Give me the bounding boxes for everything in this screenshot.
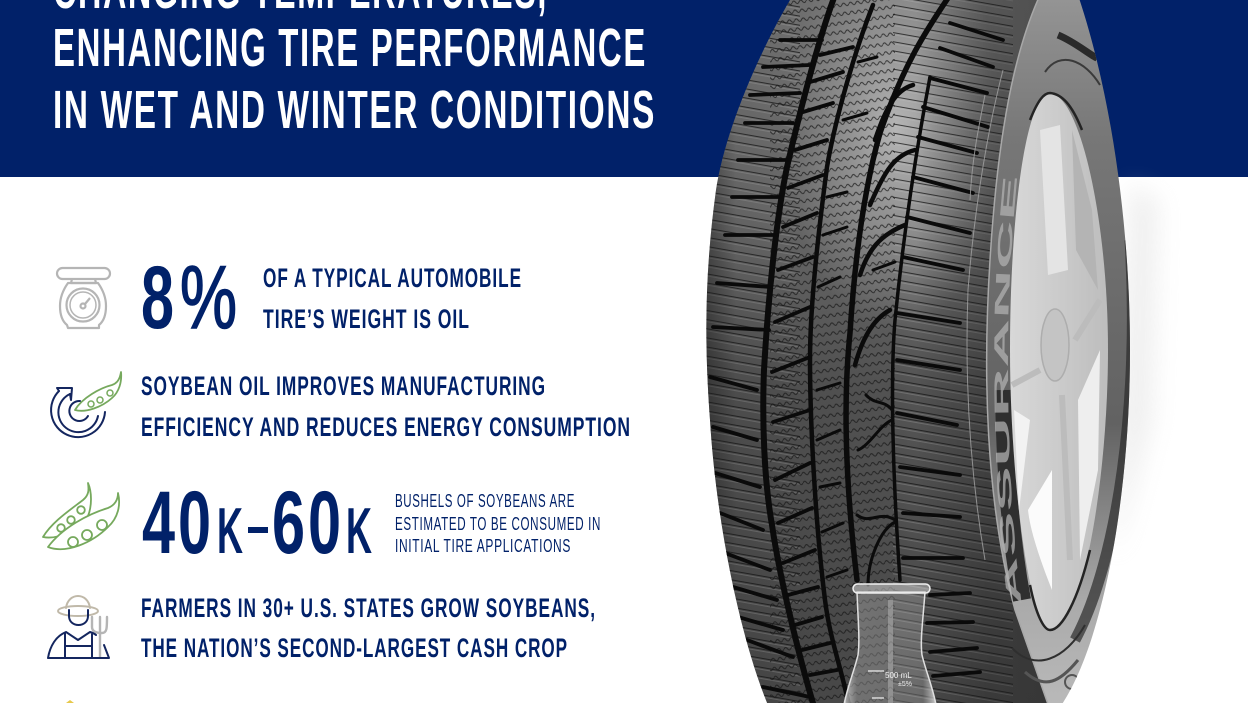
text: farmers: THE NATION’S SECOND-LARGEST CASH CROP [141,633,568,663]
title: IN WET AND WINTER CONDITIONS [53,80,656,140]
flask [843,584,937,703]
text: efficiency [141,371,631,442]
rim light gaps [1040,125,1068,275]
text: farmers [141,593,596,663]
lower sidewall details [1012,625,1085,661]
icon: soybean pods [43,483,119,549]
icon: scale [57,268,110,328]
rim outline [1030,93,1090,630]
title: ENHANCING TIRE PERFORMANCE [53,18,647,78]
stat: 40k-60k: K [346,494,372,567]
tire shadow [1115,185,1158,560]
text: weight [263,263,522,334]
stat: 8%: % [180,247,237,347]
text: bushels [395,491,601,556]
text: weight: TIRE’S WEIGHT IS OIL [263,304,470,334]
shoulder lines [967,70,1003,560]
stat: 8% [141,247,237,347]
text: efficiency: SOYBEAN OIL IMPROVES MANUFACTURING [141,371,546,401]
tire photo illustration: ASSURANCE [994,178,1022,601]
text: bushels: ESTIMATED TO BE CONSUMED IN [395,514,601,534]
row: farmers [48,593,596,663]
stat: 8%: 8 [141,247,174,347]
row: bushels stat [43,472,601,572]
outer sidewall band [1075,240,1132,640]
text: efficiency: EFFICIENCY AND REDUCES ENERGY CONSUMPTION [141,412,631,442]
text: farmers: FARMERS IN 30+ U.S. STATES GROW SOYBEANS, [141,593,596,623]
icon: cropped yellow tip [66,700,74,703]
stat: 40k-60k: 60 [272,472,344,572]
flask: 500 mL [885,671,912,680]
text: bushels: INITIAL TIRE APPLICATIONS [395,536,571,556]
stat: 40k-60k [142,472,372,572]
wheel rim [1010,93,1108,630]
flask: ±5% [898,681,912,688]
sidewall [987,0,1130,703]
text: weight: OF A TYPICAL AUTOMOBILE [263,263,522,293]
rim hub [1041,309,1069,381]
row: manufacturing efficiency [51,371,631,442]
shoulder ridge [987,0,1050,703]
icon: farmer [48,596,109,658]
tread [700,0,1060,703]
row: 8 percent stat [57,247,522,347]
stat: 40k-60k: 40 [142,472,214,572]
title [53,0,656,140]
sidewall lettering band [1004,390,1022,600]
text: bushels: BUSHELS OF SOYBEANS ARE [395,491,575,511]
tire photo illustration [706,0,1130,703]
stat: 40k-60k: K [217,494,243,567]
icon: soybean recycle [51,372,121,437]
header banner [0,0,1248,177]
